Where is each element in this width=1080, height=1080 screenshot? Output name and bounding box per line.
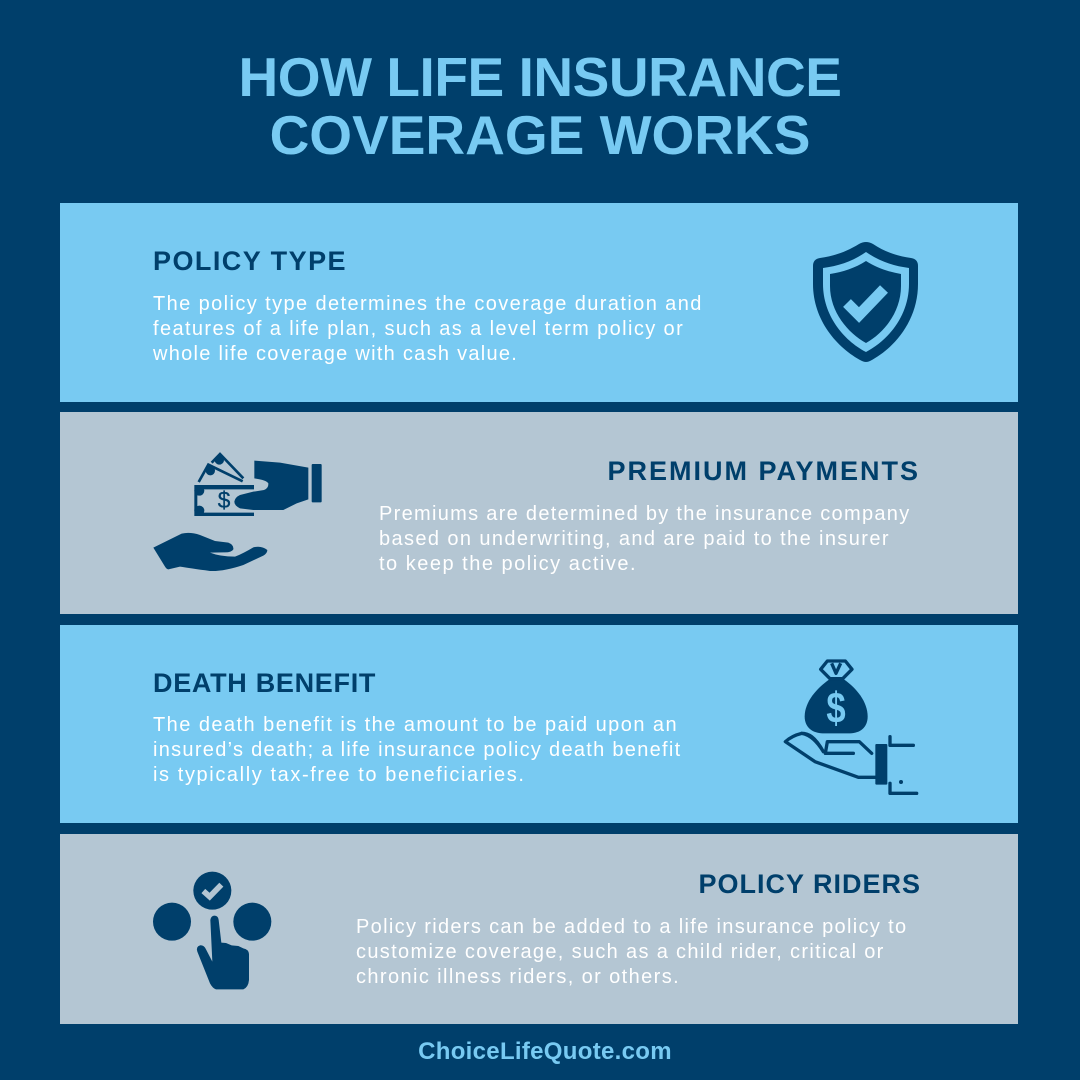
text: premium payments: to keep the policy active.: [379, 553, 637, 575]
title: COVERAGE WORKS: [270, 104, 810, 166]
panel: policy riders: [60, 834, 1018, 1024]
text: premium payments: based on underwriting, and are paid to the insurer: [379, 528, 890, 550]
title: HOW LIFE INSURANCE: [238, 46, 842, 108]
title: [238, 46, 842, 166]
text: policy type: [153, 293, 703, 365]
text: premium payments: [379, 503, 911, 575]
heading: premium payments: PREMIUM PAYMENTS: [607, 456, 920, 486]
icon: shield: [813, 242, 918, 362]
panel: policy type: [60, 203, 1018, 402]
heading: death benefit: DEATH BENEFIT: [153, 668, 376, 698]
text: policy type: whole life coverage with cash value.: [153, 343, 518, 365]
text: policy riders: chronic illness riders, or others.: [356, 966, 680, 988]
icon: hands exchanging money: $: [218, 487, 231, 513]
text: death benefit: insured’s death; a life insurance policy death benefit: [153, 739, 681, 761]
footer: website: ChoiceLifeQuote.com: [418, 1038, 672, 1065]
heading: policy riders: POLICY RIDERS: [698, 869, 921, 899]
text: death benefit: The death benefit is the amount to be paid upon an: [153, 714, 678, 736]
text: death benefit: [153, 714, 681, 786]
text: policy riders: customize coverage, such as a child rider, critical or: [356, 941, 885, 963]
icon: hand holding money bag: [784, 659, 918, 795]
icon: finger selecting option: [153, 872, 272, 990]
icon: hand holding money bag: $: [826, 684, 846, 733]
text: policy riders: [356, 916, 907, 988]
panel: death benefit: [60, 625, 1018, 823]
text: policy riders: Policy riders can be added to a life insurance policy to: [356, 916, 907, 938]
text: policy type: The policy type determines the coverage duration and: [153, 293, 703, 315]
text: death benefit: is typically tax-free to beneficiaries.: [153, 764, 526, 786]
icon: hands exchanging money: [153, 452, 322, 571]
text: premium payments: Premiums are determined by the insurance company: [379, 503, 911, 525]
heading: policy type: POLICY TYPE: [153, 246, 347, 276]
text: policy type: features of a life plan, such as a level term policy or: [153, 318, 684, 340]
panel: premium payments: [60, 412, 1018, 614]
